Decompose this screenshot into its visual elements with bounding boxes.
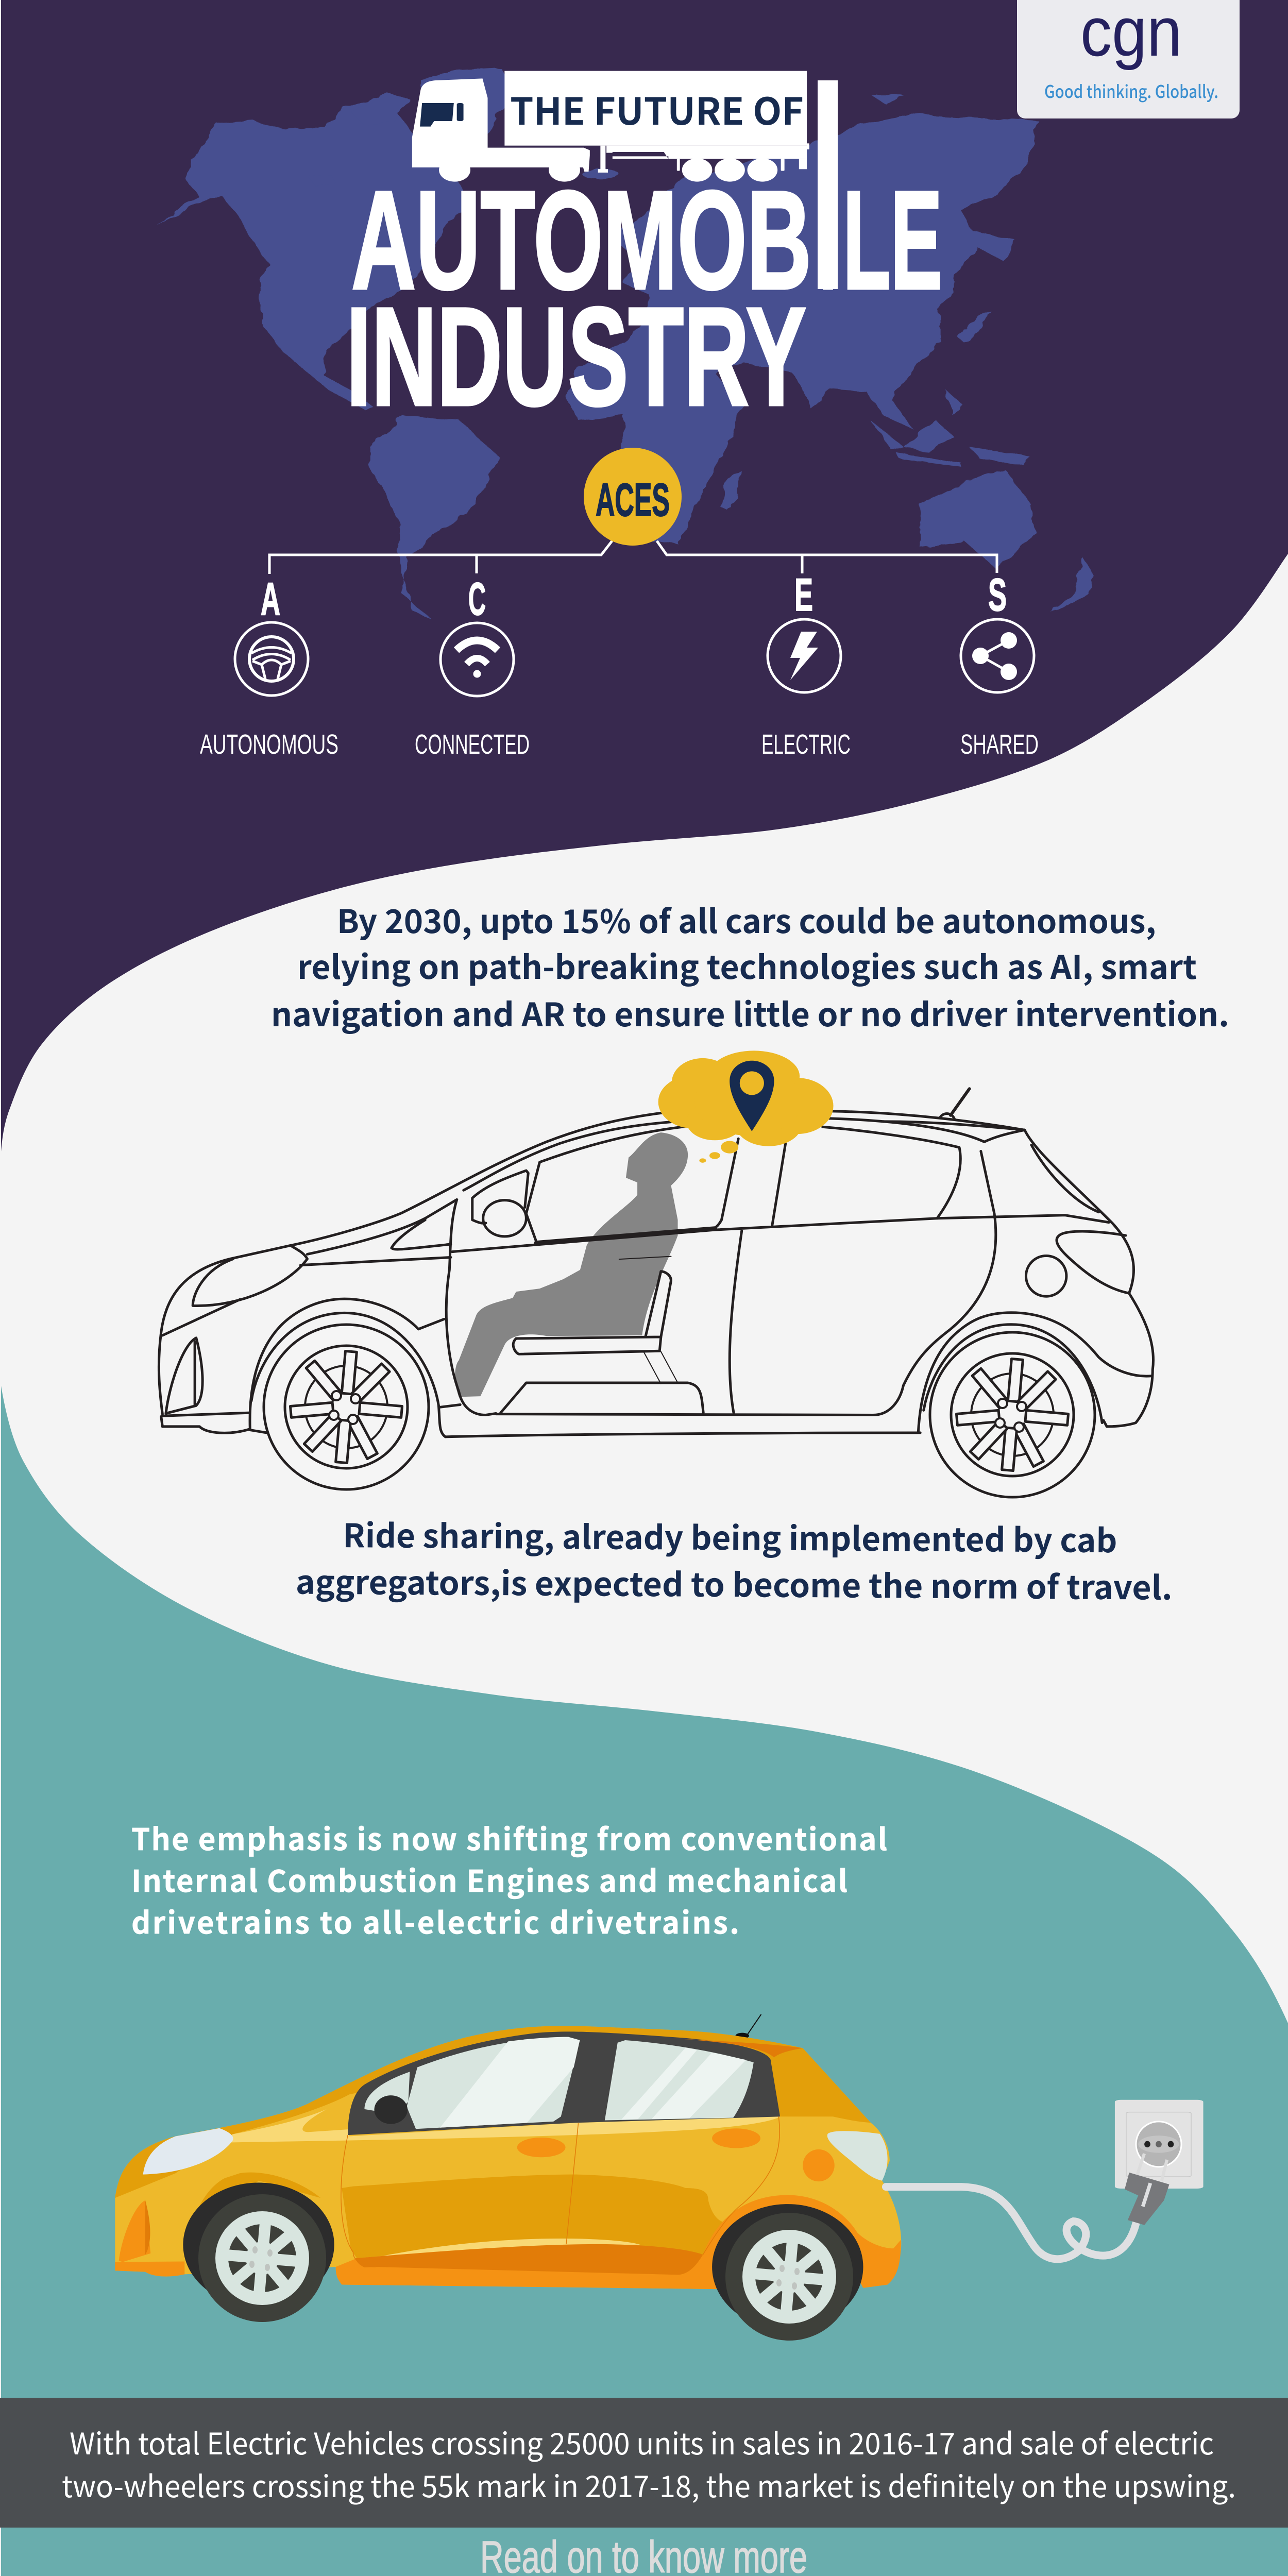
- label: SHARED: [960, 729, 1039, 760]
- wall socket with plug: [1115, 2100, 1204, 2225]
- connector lines: [269, 541, 997, 574]
- icon: share nodes: [961, 619, 1034, 692]
- thought cloud with location pin: [658, 1050, 834, 1163]
- text: autonomous cars: [271, 896, 1229, 1036]
- logo card: [1017, 0, 1240, 118]
- item: connected: C: [468, 573, 486, 624]
- illustration: yellow electric car: [115, 2014, 1204, 2341]
- icon: steering wheel: [235, 622, 308, 696]
- front wheel: [198, 2194, 326, 2322]
- text: electric shift: The emphasis is now shifting from conventional: [131, 1816, 887, 1859]
- item: electric: E: [794, 569, 813, 620]
- icon: wifi: [440, 623, 514, 696]
- item: shared: [960, 569, 1039, 760]
- banner: sales statistics: two-wheelers crossing the 55k mark in 2017-18, the market is definitely on the upswing.: [62, 2463, 1236, 2506]
- text: electric shift: [131, 1816, 887, 1942]
- item: connected: [415, 573, 530, 760]
- title: automobile: AUTOMOB: [351, 162, 811, 318]
- title: industry: INDUSTRY: [346, 278, 806, 435]
- item: autonomous: A: [261, 573, 280, 624]
- rear wheel: [725, 2213, 853, 2341]
- text: ride sharing: [296, 1510, 1173, 1609]
- item: electric: [761, 569, 851, 760]
- icon: lightning bolt: [768, 619, 841, 692]
- badge: ACES: [584, 448, 682, 546]
- icon: white truck with title box: [412, 71, 809, 182]
- label: ELECTRIC: [761, 729, 851, 760]
- text: electric shift: drivetrains to all-electric drivetrains.: [131, 1899, 739, 1942]
- text: autonomous cars: navigation and AR to ensure little or no driver intervention.: [271, 989, 1229, 1036]
- label: CONNECTED: [415, 729, 530, 760]
- panel: purple header with curved edge: [1, 0, 1288, 1151]
- title: tall letter bar: [818, 80, 838, 289]
- world map: [156, 69, 1094, 619]
- label: AUTONOMOUS: [200, 729, 338, 760]
- panel: teal lower section with curved edge: [1, 1386, 1288, 2576]
- title: automobile: LE: [843, 162, 942, 318]
- item: autonomous: [200, 573, 338, 760]
- text: autonomous cars: By 2030, upto 15% of all cars could be autonomous,: [337, 896, 1156, 943]
- title: automobile: I: [819, 162, 837, 318]
- driver silhouette: [455, 1132, 688, 1397]
- car body: [115, 2014, 901, 2330]
- charging cable: [886, 2187, 1137, 2259]
- illustration: outline car with driver: [159, 1050, 1154, 1497]
- car body lines: [159, 1089, 1154, 1437]
- banner: sales statistics: [0, 2398, 1288, 2528]
- rear wheel: [930, 1332, 1095, 1497]
- text: autonomous cars: relying on path-breaking technologies such as AI, smart: [297, 942, 1197, 989]
- badge: ACES: ACES: [596, 474, 670, 526]
- heading: the future of: THE FUTURE OF: [510, 81, 804, 135]
- front wheel: [264, 1325, 429, 1489]
- text: ride sharing: aggregators,is expected to become the norm of travel.: [296, 1557, 1173, 1609]
- text: ride sharing: Ride sharing, already being implemented by cab: [343, 1510, 1117, 1562]
- logo tagline: Good thinking. Globally.: [1044, 78, 1218, 103]
- item: shared: S: [988, 569, 1007, 620]
- text: electric shift: Internal Combustion Engines and mechanical: [131, 1857, 848, 1901]
- banner: sales statistics: With total Electric Vehicles crossing 25000 units in sales in 2016-17 and sale of electric: [70, 2420, 1214, 2463]
